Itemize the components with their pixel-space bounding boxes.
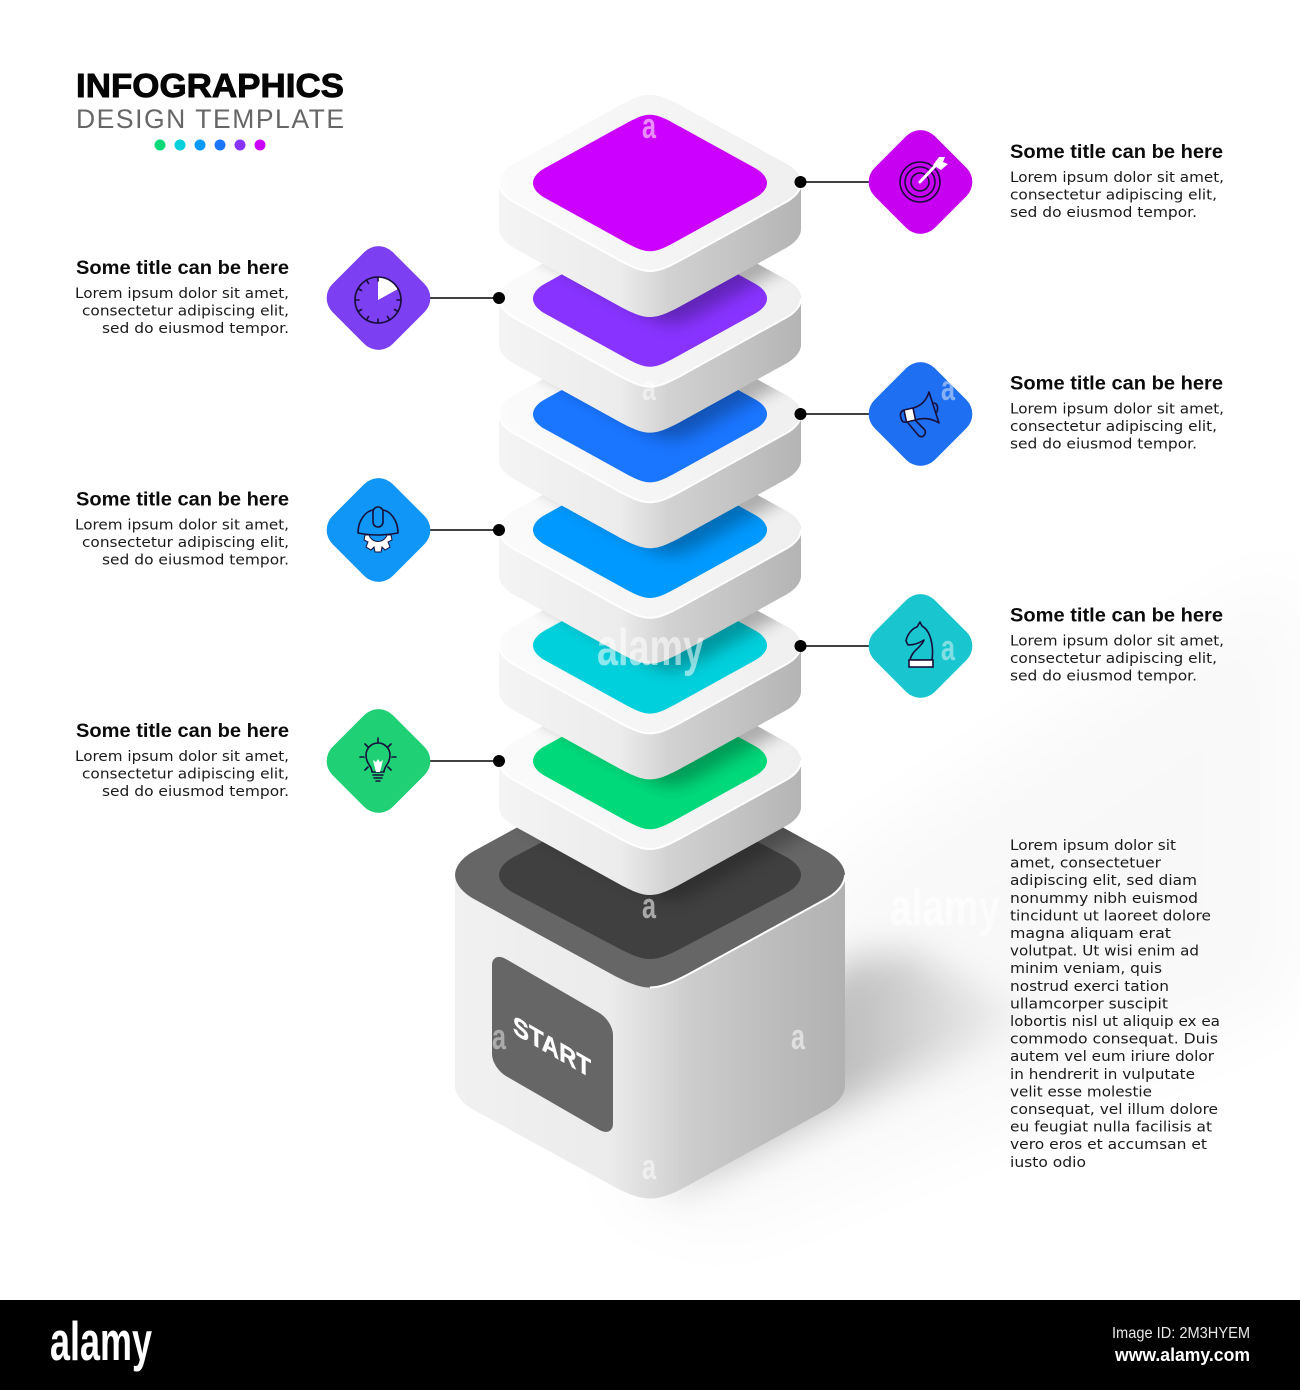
watermarks — [492, 105, 1000, 1187]
watermarks: a — [642, 105, 657, 146]
palette dots — [154, 140, 266, 150]
watermarks: alamy — [890, 879, 1000, 937]
paragraph: Lorem ipsum dolor sit — [1010, 838, 1176, 854]
text block: layer 2: sed do eiusmod tempor. — [1010, 668, 1197, 684]
connector: blue — [794, 408, 872, 420]
icon: chess knight — [860, 586, 981, 706]
paragraph: volutpat. Ut wisi enim ad — [1010, 944, 1199, 960]
watermarks: a — [791, 1016, 806, 1057]
paragraph: ullamcorper suscipit — [1010, 996, 1168, 1012]
connector: purple — [428, 292, 505, 304]
paragraph: commodo consequat. Duis — [1010, 1032, 1218, 1048]
connector: cyan — [794, 640, 872, 652]
layer 5: purple slab — [499, 264, 801, 433]
paragraph: in hendrerit in vulputate — [1010, 1067, 1195, 1083]
text block: layer 6: consectetur adipiscing elit, — [1010, 188, 1217, 204]
text block: layer 2: consectetur adipiscing elit, — [1010, 651, 1217, 667]
text block: layer 4: Some title can be here — [1010, 372, 1223, 394]
layer 2: cyan slab — [499, 610, 801, 780]
paragraph — [1010, 838, 1220, 1171]
watermarks: a — [642, 885, 657, 926]
watermarks: alamy — [597, 619, 704, 677]
text block: layer 1 — [75, 720, 289, 800]
paragraph: lobortis nisl ut aliquip ex ea — [1010, 1014, 1220, 1030]
text block: layer 1: consectetur adipiscing elit, — [82, 766, 289, 782]
text block: layer 3: consectetur adipiscing elit, — [82, 535, 289, 551]
footer band — [0, 1300, 1300, 1390]
faint long cast shadow — [600, 560, 1300, 1235]
paragraph: vero eros et accumsan et — [1010, 1137, 1207, 1153]
base body — [455, 875, 845, 1198]
text block: layer 3: Some title can be here — [76, 488, 289, 510]
paragraph: autem vel eum iriure dolor — [1010, 1049, 1214, 1065]
text block: layer 2: Lorem ipsum dolor sit amet, — [1010, 634, 1224, 650]
base top rim — [455, 763, 845, 987]
icon: megaphone — [860, 354, 981, 474]
watermarks: a — [492, 1016, 507, 1057]
paragraph: nonummy nibh euismod — [1010, 891, 1198, 907]
layer 4: blue slab — [499, 380, 801, 548]
text block: layer 2: Some title can be here — [1010, 604, 1223, 626]
title: INFOGRAPHICS — [76, 67, 344, 104]
text block: layer 1: Lorem ipsum dolor sit amet, — [75, 749, 289, 765]
text block: layer 5: sed do eiusmod tempor. — [102, 321, 289, 337]
paragraph: tincidunt ut laoreet dolore — [1010, 908, 1211, 924]
text block: layer 4 — [1010, 372, 1224, 452]
paragraph: nostrud exerci tation — [1010, 979, 1169, 995]
text block: layer 6: Some title can be here — [1010, 141, 1223, 163]
footer logo: alamy — [50, 1310, 152, 1372]
paragraph: amet, consectetuer — [1010, 856, 1161, 872]
text block: layer 2 — [1010, 604, 1224, 684]
text block: layer 3: Lorem ipsum dolor sit amet, — [75, 518, 289, 534]
layer 1: green slab — [499, 726, 801, 895]
shadow from slab on base — [652, 828, 804, 900]
text block: layer 5 — [75, 257, 289, 337]
text block: layer 1: sed do eiusmod tempor. — [102, 784, 289, 800]
watermarks: a — [642, 367, 657, 408]
paragraph: iusto odio — [1010, 1155, 1086, 1171]
layer 6: magenta slab — [499, 95, 801, 317]
text block: layer 6 — [1010, 141, 1224, 221]
text block: layer 5: Lorem ipsum dolor sit amet, — [75, 286, 289, 302]
icon: target — [860, 122, 981, 242]
text block: layer 1: Some title can be here — [76, 720, 289, 742]
layer 3: sky blue slab — [499, 495, 801, 664]
site url: www.alamy.com — [1114, 1345, 1250, 1365]
paragraph: velit esse molestie — [1010, 1084, 1152, 1100]
icon: light bulb — [318, 701, 439, 821]
connector: green — [428, 755, 505, 767]
text block: layer 4: Lorem ipsum dolor sit amet, — [1010, 402, 1224, 418]
base block with START label — [455, 828, 845, 1198]
title: DESIGN TEMPLATE — [76, 104, 344, 134]
paragraph: minim veniam, quis — [1010, 961, 1162, 977]
text block: layer 4: sed do eiusmod tempor. — [1010, 436, 1197, 452]
paragraph: magna aliquam erat — [1010, 926, 1171, 942]
base cast shadow — [660, 950, 1040, 1198]
START panel: START — [513, 1010, 591, 1084]
image id: Image ID: 2M3HYEM — [1112, 1325, 1250, 1342]
START panel — [492, 951, 613, 1138]
watermarks: a — [941, 627, 956, 668]
text block: layer 6: sed do eiusmod tempor. — [1010, 205, 1197, 221]
connector: magenta — [794, 176, 872, 188]
text block: layer 5: Some title can be here — [76, 257, 289, 279]
icon: helmet and gear — [318, 470, 439, 590]
text block: layer 4: consectetur adipiscing elit, — [1010, 419, 1217, 435]
icon: clock — [318, 238, 439, 358]
paragraph: adipiscing elit, sed diam — [1010, 873, 1197, 889]
text block: layer 3: sed do eiusmod tempor. — [102, 552, 289, 568]
text block: layer 3 — [75, 488, 289, 568]
connector: sky blue — [428, 524, 505, 536]
title — [76, 67, 344, 134]
base inner recess — [499, 791, 801, 959]
text block: layer 5: consectetur adipiscing elit, — [82, 304, 289, 320]
paragraph: consequat, vel illum dolore — [1010, 1102, 1218, 1118]
watermarks: a — [642, 1146, 657, 1187]
watermarks: a — [941, 367, 956, 408]
text block: layer 6: Lorem ipsum dolor sit amet, — [1010, 170, 1224, 186]
base rim highlight — [650, 875, 845, 988]
paragraph: eu feugiat nulla facilisis at — [1010, 1120, 1212, 1136]
